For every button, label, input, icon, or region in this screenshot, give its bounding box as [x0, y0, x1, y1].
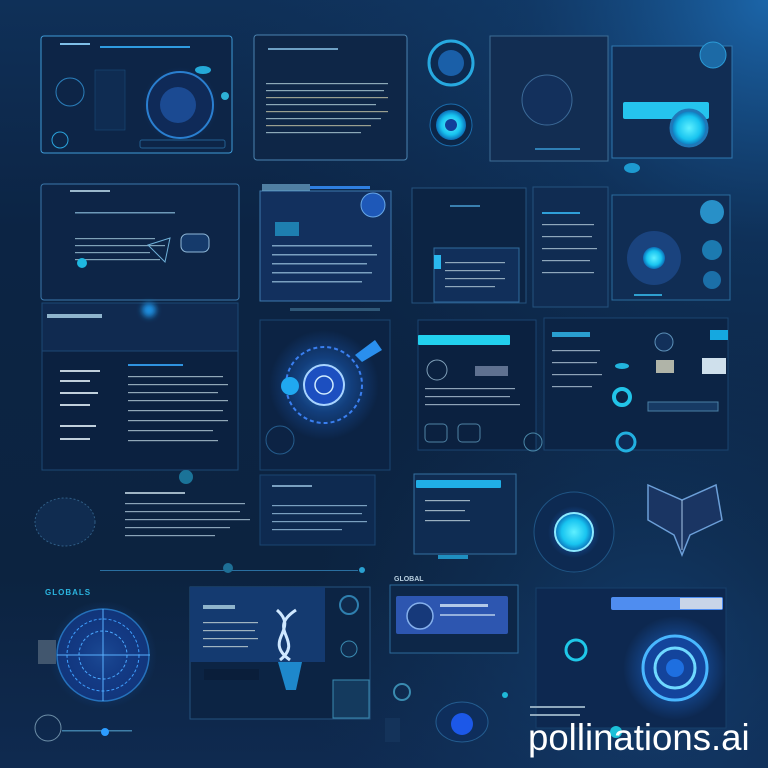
icon: glowing cyan disc [534, 492, 614, 572]
panel: centre tall top [260, 184, 391, 301]
panel: top text document [254, 35, 407, 160]
watermark: pollinations.ai [528, 717, 750, 758]
panel: right upper pair [533, 187, 730, 307]
panel: top left module [41, 36, 232, 153]
panel: centre tall bottom with radar [260, 308, 390, 470]
panel: bottom right device [530, 588, 727, 738]
panel: bottom centre blue card: GLOBAL [394, 576, 424, 583]
panel: left text column [42, 303, 238, 470]
icon: radial blue dial [142, 66, 229, 143]
panel: browser module [414, 474, 516, 559]
panel: centre right dark module [412, 188, 526, 303]
panel: right column icons [544, 318, 728, 451]
panel: wide chart panel [41, 184, 239, 300]
panel: centre module with cyan bar [418, 320, 542, 451]
icon: blue globe [35, 601, 157, 741]
panel: bottom centre-left document [190, 587, 370, 719]
icon: eye rings [429, 41, 473, 146]
panel: top right modules [490, 36, 732, 173]
icon: bottom centre lens [385, 684, 508, 742]
panel: bottom centre blue card [390, 576, 518, 653]
panel: centre lower [260, 475, 375, 545]
heading: bottom left label: GLOBALS [45, 588, 91, 597]
panel: lower left text strip [35, 470, 250, 546]
heading: bottom left label [45, 563, 365, 597]
icon: butterfly shield [648, 485, 722, 555]
